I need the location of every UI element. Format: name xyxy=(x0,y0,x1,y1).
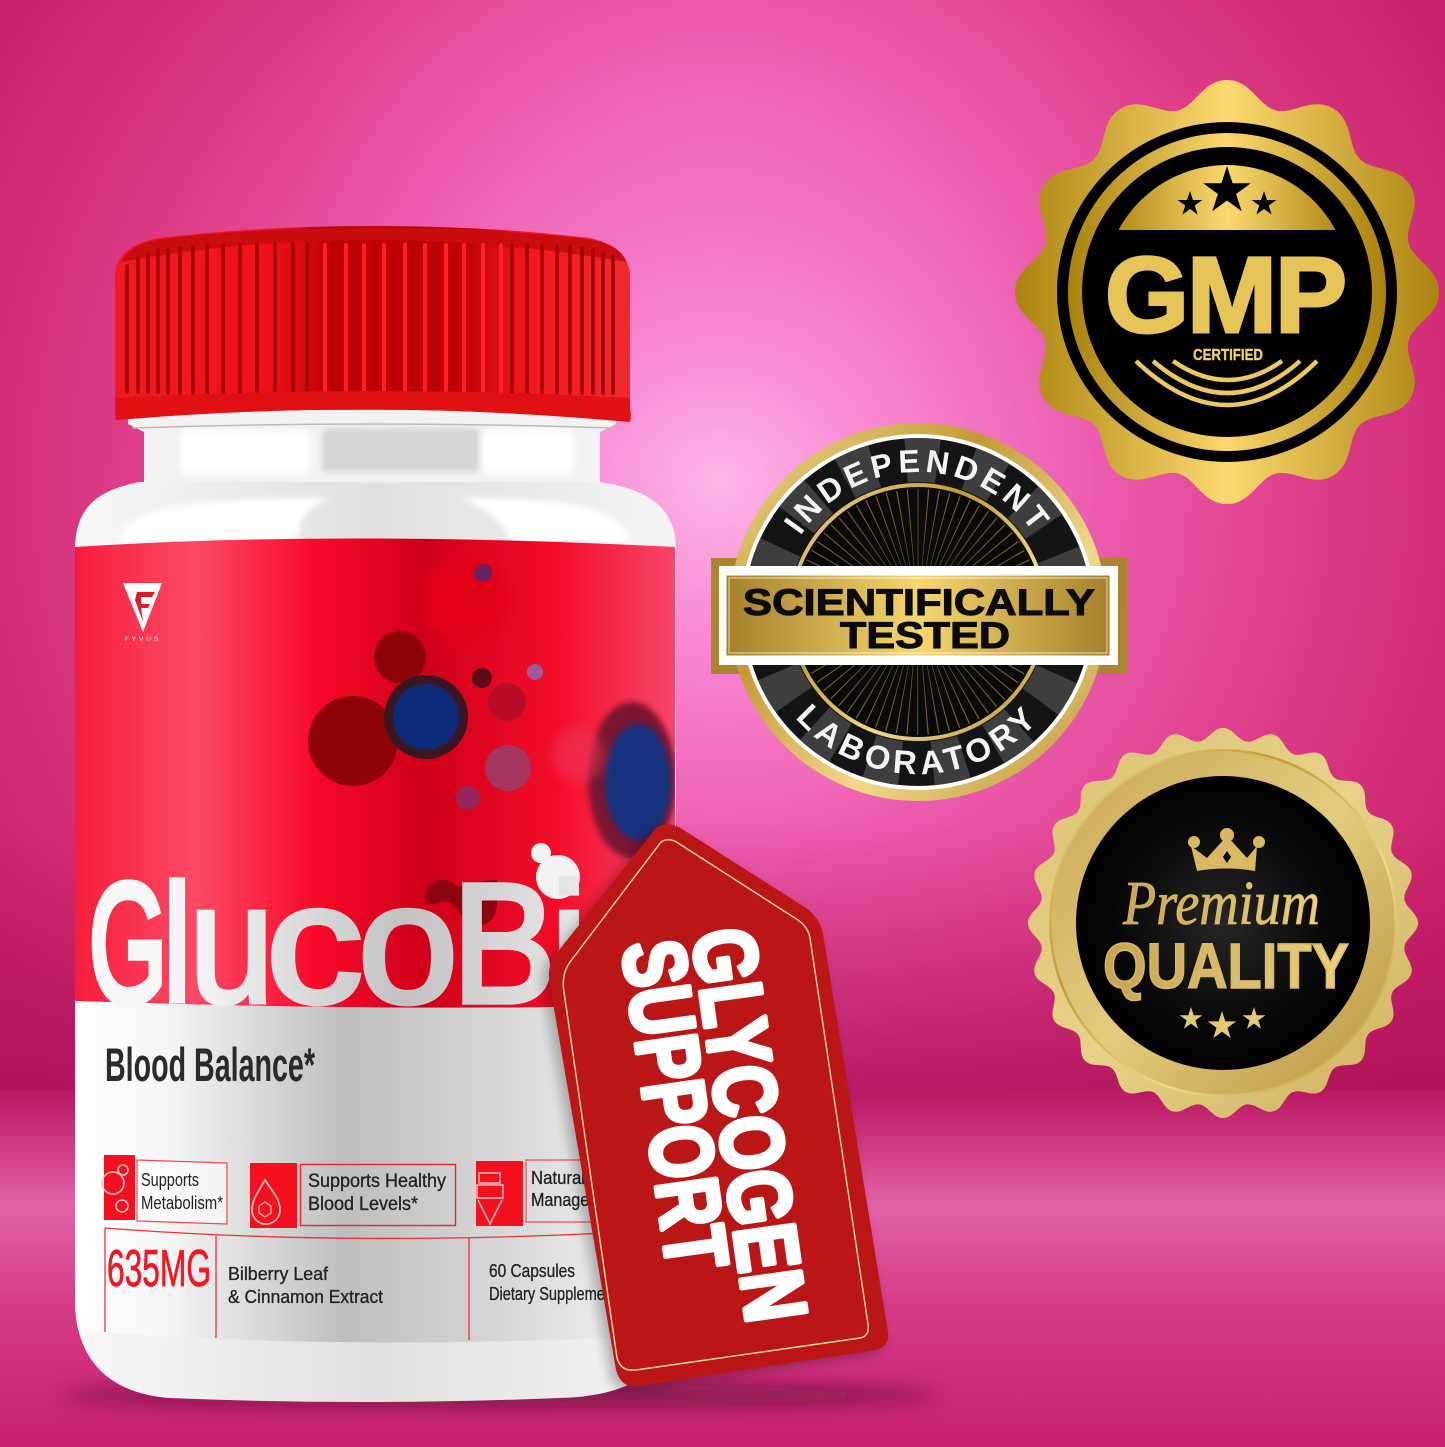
badge: premium quality xyxy=(1025,725,1421,1121)
benefit: weight management: Natural xyxy=(531,1168,585,1188)
badge: GMP certified xyxy=(1010,75,1444,509)
benefit: weight management xyxy=(476,1160,625,1226)
glycogen support tag: SUPPORT xyxy=(603,934,747,1275)
ribbon back xyxy=(711,558,1127,674)
product name: u xyxy=(189,849,274,1039)
crown xyxy=(1188,828,1265,871)
ribbon front xyxy=(719,566,1118,665)
product name: G xyxy=(89,849,167,1039)
red label panel xyxy=(75,538,675,1008)
scalloped rim xyxy=(1025,725,1421,1121)
bottle neck xyxy=(128,410,616,484)
shoulder highlights xyxy=(118,498,632,542)
ingredients: & Cinnamon Extract xyxy=(228,1286,383,1307)
sunburst rays xyxy=(848,542,988,682)
tag text: GLYCOGEN xyxy=(673,922,826,1328)
wavy gold seal xyxy=(1010,75,1444,509)
ribbon text: SCIENTIFICALLY xyxy=(743,582,1095,623)
product name: o xyxy=(358,849,458,1039)
molecule graphic xyxy=(308,558,676,926)
product name xyxy=(89,849,588,1039)
capsule count xyxy=(489,1260,617,1304)
round seal xyxy=(729,423,1107,801)
product name: B xyxy=(452,849,556,1039)
certified text: CERTIFIED xyxy=(1193,347,1263,364)
benefit: metabolism: Supports xyxy=(141,1170,199,1190)
product name: l xyxy=(160,849,194,1039)
product name: i xyxy=(550,849,588,1039)
badge: scientifically tested: TESTED xyxy=(840,615,1010,656)
dome with stars xyxy=(1118,165,1336,230)
ingredients: Bilberry Leaf xyxy=(228,1263,329,1284)
badge: scientifically tested xyxy=(711,423,1127,801)
product name: c xyxy=(266,849,363,1039)
arcs xyxy=(1136,361,1317,405)
brand logo xyxy=(123,583,162,643)
product bottle xyxy=(75,226,676,1402)
stars xyxy=(1180,1007,1265,1038)
quality text: QUALITY xyxy=(1103,930,1349,1002)
tagline: Blood Balance* xyxy=(105,1038,315,1091)
GMP text: GMP xyxy=(1105,234,1347,355)
bottle body xyxy=(75,482,676,1402)
independent: INDEPENDENT xyxy=(784,450,1050,534)
ingredients xyxy=(228,1263,383,1307)
glycogen support tag xyxy=(543,824,888,1391)
benefit: metabolism xyxy=(102,1155,227,1224)
bottle cap xyxy=(115,226,631,422)
capsule count: 60 Capsules xyxy=(489,1260,575,1281)
benefit: weight management: Management xyxy=(531,1190,625,1210)
premium text: Premium xyxy=(1122,870,1320,938)
benefit: blood levels: Blood Levels* xyxy=(308,1194,419,1215)
brand logo: FYVUS xyxy=(125,636,161,643)
benefit: blood levels xyxy=(250,1163,456,1228)
white lower label xyxy=(75,1001,581,1342)
dosage: 635MG xyxy=(107,1240,211,1298)
benefit: blood levels: Supports Healthy xyxy=(308,1171,446,1192)
benefit: metabolism: Metabolism* xyxy=(141,1193,223,1213)
capsule count: Dietary Supplement xyxy=(489,1283,617,1304)
info frame lines xyxy=(105,1228,606,1340)
laboratory: LABORATORY xyxy=(796,704,1032,774)
